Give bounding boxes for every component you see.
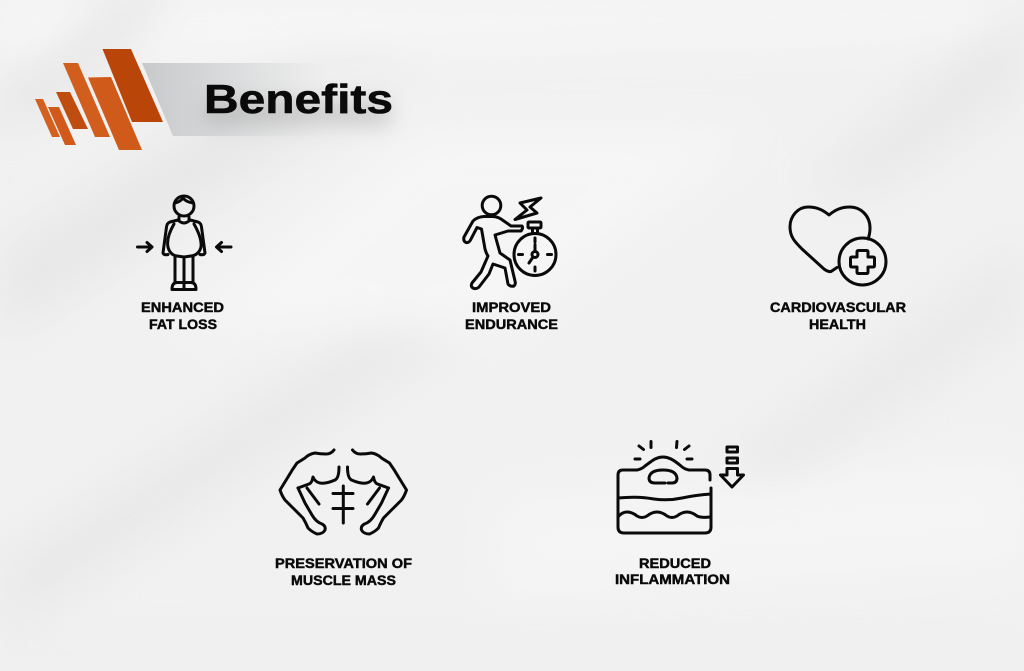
icon: heart with plus [790,207,886,285]
icon: skin layers with swelling [618,442,744,533]
label: PRESERVATION OF [275,556,412,571]
benefit: reduced inflammation [615,442,744,587]
label: REDUCED [639,556,711,571]
icon: walking figure with stopwatch [464,196,556,289]
label: INFLAMMATION [615,572,730,587]
label: ENHANCED [141,300,224,315]
title: Benefits [204,76,393,122]
label [465,300,558,332]
icon: muscular torso [280,450,406,534]
label [770,300,906,332]
label [275,556,412,588]
label: MUSCLE MASS [291,573,396,588]
banner band [142,63,425,136]
icon: body with arrows [138,196,231,290]
benefit: preservation of muscle mass [275,450,412,588]
label: FAT LOSS [149,317,217,332]
benefit: enhanced fat loss [138,196,231,332]
benefit: cardiovascular health [770,207,906,332]
label: IMPROVED [472,300,551,315]
label: CARDIOVASCULAR [770,300,906,315]
label [141,300,224,332]
label: ENDURANCE [465,317,558,332]
logo: orange bars [35,49,163,150]
label [615,556,730,587]
header banner [35,49,425,150]
label: HEALTH [809,317,866,332]
benefit: improved endurance [464,196,558,332]
